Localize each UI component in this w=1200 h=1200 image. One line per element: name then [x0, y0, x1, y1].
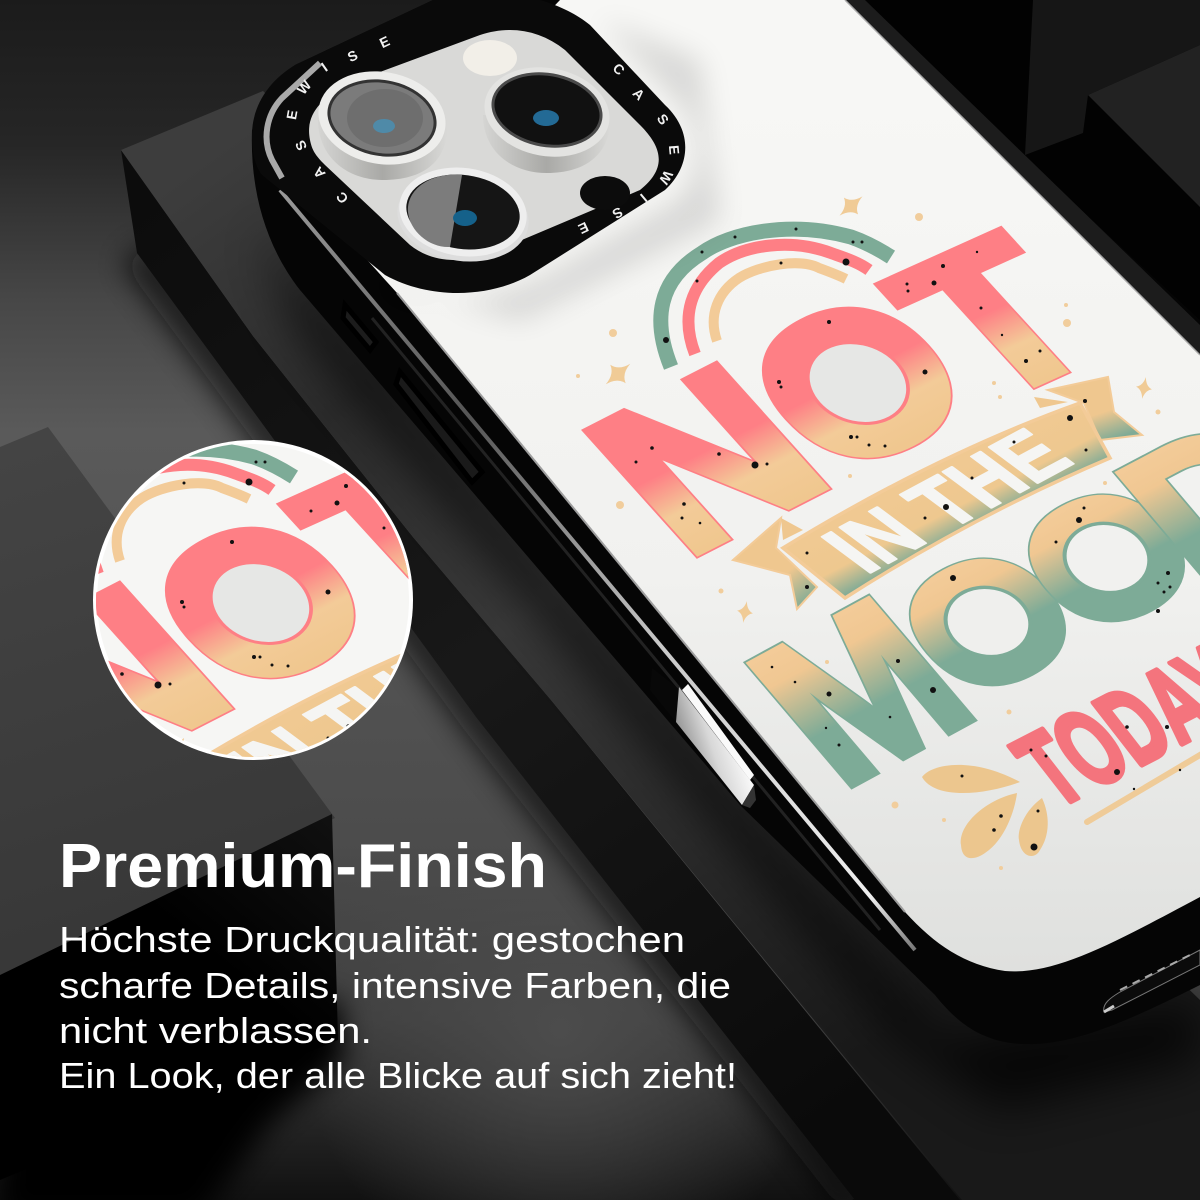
block: upper-right dark blocks: [840, 0, 1200, 420]
block: central pedestal shadow: [137, 253, 855, 1200]
body text: Ein Look, der alle Blicke auf sich zieht!: [59, 1055, 737, 1096]
clear bumper strip: [267, 63, 320, 178]
block: lower-left stair: [0, 427, 338, 1180]
brand lettering: CASEWISE: S: [654, 111, 672, 128]
island bumper: [252, 0, 685, 293]
camera window: [309, 30, 659, 260]
magnifier circle: artwork detail: [93, 440, 413, 760]
word: NOT: O: [696, 248, 1019, 517]
lens: tele: [477, 58, 617, 173]
word: NOT: T: [845, 194, 1145, 443]
brand lettering: CASEWISE: W: [655, 168, 676, 188]
brand lettering: CASEWISE: S: [345, 47, 360, 65]
brand lettering: CASEWISE: C: [610, 60, 628, 78]
brand lettering: CASEWISE: A: [630, 85, 648, 103]
zoomed word: NOT: O: [99, 468, 422, 737]
word: MOOD: O: [856, 508, 1120, 735]
brand lettering: CASEWISE: I: [318, 59, 330, 75]
brand lettering: CASEWISE: A: [310, 164, 328, 182]
phone contact shadow: [260, 230, 1200, 1110]
word: NOT: T: [845, 194, 1145, 443]
bottom port: [1104, 950, 1200, 1012]
brand lettering: CASEWISE: C: [333, 189, 351, 207]
lens: main wide: [311, 62, 453, 180]
zoomed banner: IN THE: [206, 636, 494, 807]
stars: [598, 188, 1154, 624]
phone case: [252, 0, 1200, 1044]
peach dots: [576, 213, 1160, 870]
phone body: [252, 0, 1200, 1044]
zoomed rainbow: [98, 444, 298, 574]
banner: IN THE: [733, 377, 1142, 609]
word: NOT: [541, 194, 1145, 597]
word: NOT: N: [541, 321, 873, 597]
side buttons: [343, 305, 482, 482]
word: MOOD: [706, 375, 1200, 827]
silver action button: [650, 668, 756, 808]
lower-left soft shadow: [0, 1000, 345, 1200]
lens: ultra wide: [392, 160, 534, 270]
brand lettering: CASEWISE: E: [377, 33, 392, 51]
zoomed speckles: [120, 460, 386, 739]
zoomed word: NOT: T: [248, 414, 548, 663]
black speckles: [634, 228, 1181, 850]
word: MOOD: O: [856, 508, 1120, 735]
brand lettering: CASEWISE: S: [610, 204, 626, 222]
leaves: [922, 765, 1048, 858]
banner: IN THE: IN THE: [803, 416, 1091, 587]
word: NOT: N: [541, 321, 873, 597]
brand lettering: CASEWISE: I: [637, 191, 650, 205]
body text: scharfe Details, intensive Farben, die: [59, 965, 731, 1006]
heading: Premium-Finish: [59, 832, 547, 901]
zoomed banner: [182, 654, 400, 757]
brand lettering: CASEWISE: E: [666, 145, 683, 155]
phone artwork: NOT IN THE MOOD TODAY: [541, 188, 1200, 870]
brand lettering: CASEWISE: E: [283, 109, 300, 121]
microphone: [580, 176, 630, 210]
underline: [1087, 752, 1200, 822]
brand lettering: CASEWISE: S: [292, 138, 310, 153]
flash: [463, 40, 517, 76]
zoomed word: NOT: O: [99, 468, 422, 737]
word: NOT: O: [696, 248, 1019, 517]
phone rim top right: [845, 0, 1200, 355]
rim highlight lines: [280, 0, 1200, 950]
island shadow: [380, 20, 720, 320]
brand lettering: CASEWISE: [283, 33, 683, 237]
block: central pedestal side face: [121, 150, 960, 1200]
body text: nicht verblassen.: [59, 1010, 372, 1051]
body text: [59, 919, 737, 1096]
phone back panel: [340, 0, 1200, 971]
body text: Höchste Druckqualität: gestochen: [59, 919, 685, 960]
word: MOOD: M: [706, 555, 1014, 827]
brand lettering: CASEWISE: E: [576, 219, 591, 237]
word: MOOD: M: [706, 555, 1014, 827]
rainbow: [661, 229, 891, 367]
camera island: [252, 0, 720, 320]
zoomed word: NOT: T: [248, 414, 548, 663]
brand lettering: CASEWISE: W: [294, 76, 315, 97]
